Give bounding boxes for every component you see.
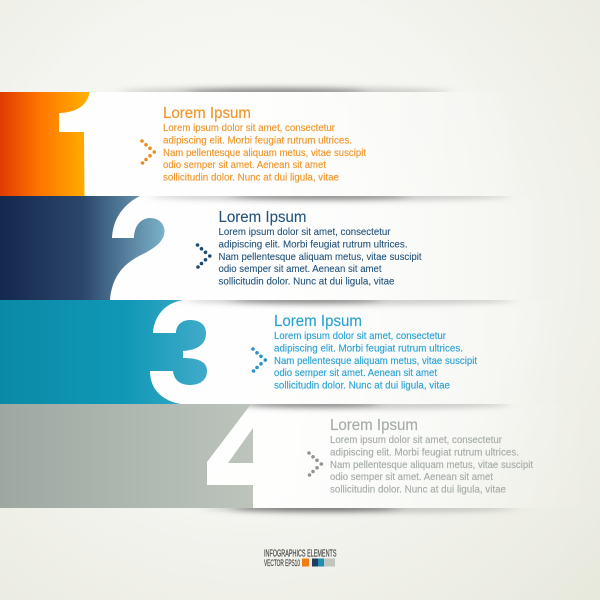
step 1 body: odio semper sit amet. Aenean sit amet (163, 159, 326, 171)
step 3 text (274, 313, 477, 392)
step 2 body (218, 226, 422, 288)
step 1 body: sollicitudin dolor. Nunc at dui ligula, vitae (163, 172, 339, 184)
step 3 heading: Lorem Ipsum (274, 313, 362, 330)
step 2 body: adipiscing elit. Morbi feugiat rutrum ultrices. (218, 238, 408, 250)
footer colour swatch (302, 558, 335, 566)
step 3 body: Lorem ipsum dolor sit amet, consectetur (274, 330, 446, 342)
panel: step 4 number colour band (0, 404, 253, 508)
step 2 body: Lorem ipsum dolor sit amet, consectetur (218, 226, 391, 238)
icon: step 3 chevron (251, 347, 267, 373)
step 1 body: Nam pellentesque aliquam metus, vitae suscipit (163, 147, 366, 159)
step 3 body (274, 330, 477, 392)
footer label (264, 548, 337, 569)
step 4 text (330, 417, 533, 496)
step 4 body: adipiscing elit. Morbi feugiat rutrum ultrices. (330, 446, 519, 458)
step 2 body: sollicitudin dolor. Nunc at dui ligula, vitae (218, 276, 395, 288)
step 4 body: Nam pellentesque aliquam metus, vitae suscipit (330, 459, 533, 471)
panel: step 1 number colour band (0, 92, 90, 196)
step 2 text (218, 209, 422, 288)
step 4 body: odio semper sit amet. Aenean sit amet (330, 471, 493, 483)
icon: step 1 chevron (140, 139, 156, 165)
band shadows (120, 87, 515, 513)
step 4 body: sollicitudin dolor. Nunc at dui ligula, vitae (330, 484, 506, 496)
step 1 body (163, 122, 366, 184)
step 3 body: odio semper sit amet. Aenean sit amet (274, 367, 437, 379)
step 4 body: Lorem ipsum dolor sit amet, consectetur (330, 434, 502, 446)
panel: white strips (0, 92, 590, 508)
step 2 body: Nam pellentesque aliquam metus, vitae suscipit (218, 251, 422, 263)
step 1 text (163, 105, 366, 184)
step 4 heading: Lorem Ipsum (330, 417, 418, 434)
step 3 body: Nam pellentesque aliquam metus, vitae suscipit (274, 355, 477, 367)
step 2 body: odio semper sit amet. Aenean sit amet (218, 263, 382, 275)
step 1 heading: Lorem Ipsum (163, 105, 251, 122)
icon: step 2 chevron (196, 243, 212, 269)
step 3 body: adipiscing elit. Morbi feugiat rutrum ultrices. (274, 342, 463, 354)
footer label: INFOGRAPHICS ELEMENTS (264, 548, 337, 560)
panel: step 2 number colour band (0, 196, 164, 300)
step 4 body (330, 434, 533, 496)
step 3 body: sollicitudin dolor. Nunc at dui ligula, vitae (274, 380, 450, 392)
panel: step 3 number colour band (0, 300, 207, 404)
icon: step 4 chevron (307, 451, 323, 477)
step 2 heading: Lorem Ipsum (218, 209, 306, 226)
step 1 body: Lorem ipsum dolor sit amet, consectetur (163, 122, 335, 134)
footer label: VECTOR EPS10 (264, 558, 300, 569)
step 1 body: adipiscing elit. Morbi feugiat rutrum ultrices. (163, 134, 352, 146)
